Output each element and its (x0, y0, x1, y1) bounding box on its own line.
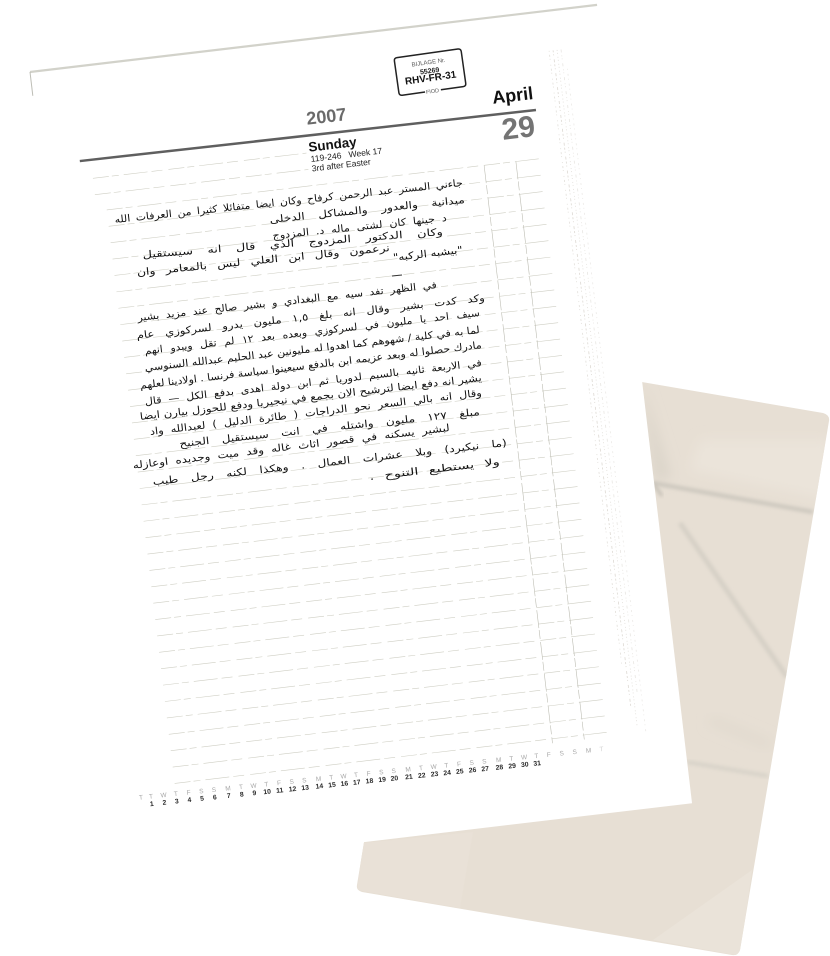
page top edge shadow (30, 5, 597, 72)
weekday letters: T (419, 765, 423, 772)
date numbers: 30 (521, 761, 529, 769)
handwritten note, second block: في الاربعة ثانيه بالسيم لدوريا ثم ابن دولة اهدى بدفع الكل — قال (144, 358, 483, 408)
date numbers: 1 (150, 801, 154, 808)
weekday letters: F (547, 752, 551, 759)
handwritten note, second block: مبلغ ١٢٧ مليون واشتله في انت سيستقيل الجنيح (179, 407, 480, 450)
date numbers: 3 (175, 798, 179, 806)
handwritten note, first block: وكان الدكتور المزدوج الذي قال انه سيستقيل (142, 227, 443, 261)
date numbers: 16 (340, 780, 349, 788)
date numbers: 28 (495, 764, 504, 772)
weekday letters: W (521, 754, 528, 762)
handwritten note, second block: وكد كدت بشير وقال انه بلغ ١,٥ مليون يدرو لسركوزي عام (136, 293, 486, 342)
date numbers: 19 (378, 776, 387, 784)
date numbers: 7 (227, 793, 231, 800)
weekday letters: W (430, 763, 438, 771)
exhibit stamp: BIJLAGE Nr. (411, 58, 446, 69)
scanner noise band at right (549, 49, 646, 736)
scanned diary page (30, 5, 692, 870)
handwritten note, second block: ولا يستطيع التنوح . (369, 457, 501, 483)
weekday letters: M (225, 785, 231, 793)
weekday letters: T (139, 794, 143, 802)
exhibit stamp: 55269 (420, 67, 440, 76)
weekday letters: S (302, 777, 308, 785)
weekday letters: S (211, 787, 217, 794)
weekday letters (139, 746, 604, 802)
weekday letters: F (366, 770, 371, 778)
date numbers: 21 (405, 774, 413, 781)
date numbers: 17 (353, 779, 361, 787)
date numbers (150, 760, 542, 808)
weekday letters: T (174, 791, 178, 798)
handwritten short dash (392, 275, 402, 276)
weekday letters: S (572, 749, 578, 756)
weekday letters: S (391, 768, 397, 775)
date numbers: 10 (263, 788, 272, 796)
weekday letters: T (239, 784, 243, 791)
handwritten note, first block: د جينها كان لشتى ماله د. المزدوج (272, 213, 447, 242)
handwritten note, second block: (ما نيكيرد) وبلا عشرات العمال . وهكذا لكنه رجل طيب (152, 438, 507, 488)
weekday letters: W (340, 773, 348, 781)
weekday letters: S (379, 769, 385, 777)
date numbers: 2 (162, 799, 167, 807)
ruled column lines (484, 162, 584, 743)
date numbers: 15 (328, 782, 336, 789)
weekday: Sunday (308, 134, 358, 155)
weekday letters: T (354, 772, 358, 779)
date numbers: 18 (365, 778, 374, 786)
weekday letters: F (277, 780, 281, 787)
date numbers: 31 (533, 760, 542, 768)
handwritten note, first block: نرعمون وقال ابن العلي ليس بالمعامر وان (136, 243, 390, 279)
handwritten note, second block (132, 280, 507, 488)
exhibit stamp (394, 49, 467, 100)
creased beige backing sheet (357, 368, 830, 956)
date numbers: 14 (315, 783, 324, 791)
day and week count: 119-246 Week 17 (310, 146, 383, 164)
date numbers: 12 (288, 786, 297, 794)
date numbers: 29 (508, 763, 517, 771)
weekday letters: T (444, 762, 449, 770)
handwritten note, second block: سيف احد يا مليون في لسركوزي وبعده بعد ١٢ لم تقل ويبدو انهم (144, 308, 480, 357)
handwritten note, first block: جاءني المستر عبد الرحمن كرفاح وكان ايضا متفائلا كثيرا من العرفات الله (114, 178, 463, 226)
date numbers: 5 (200, 796, 205, 803)
weekday letters: S (559, 750, 565, 758)
handwritten note, first block: "بيشبه الركبه" (393, 245, 463, 264)
calendar date strip (139, 746, 605, 809)
date numbers: 22 (418, 772, 426, 780)
day number: 29 (500, 110, 537, 147)
exhibit stamp: FIOD (426, 88, 440, 96)
date numbers: 20 (390, 775, 399, 783)
weekday letters: T (599, 746, 604, 753)
weekday letters: F (186, 789, 191, 797)
ruled lines (93, 126, 609, 785)
weekday letters: T (264, 781, 269, 789)
handwritten note, second block: يشير انه دفع ايضا لترشيح الان بجمع في نيجيريا ودفع للحوزل بيارن ايضا (139, 373, 483, 423)
year: 2007 (305, 104, 347, 129)
weekday letters: S (199, 788, 205, 795)
date numbers: 4 (187, 797, 192, 804)
weekday letters: M (586, 747, 592, 755)
handwritten note, second block: لما به في كلية / شهوهم كما اهدوا له مليونين عبد الحليم عبدالله السنوسي (144, 325, 480, 374)
handwritten note, second block: في الظهر تفد سيه مع البغدادي و بشير صالح عند مزيد بشير (136, 280, 438, 324)
handwritten note, first block (114, 178, 465, 279)
handwritten note, first block: ميدانية والعدور والمشاكل الدخلى (269, 195, 465, 226)
weekday letters: F (457, 761, 461, 768)
header rule (80, 107, 536, 164)
date numbers: 13 (301, 784, 310, 792)
date numbers: 25 (456, 768, 464, 776)
weekday letters: T (509, 755, 514, 763)
month: April (491, 83, 534, 108)
weekday letters: S (469, 760, 475, 767)
date numbers: 24 (443, 770, 452, 777)
page sheet (30, 5, 692, 870)
date numbers: 27 (481, 766, 490, 773)
weekday letters: S (289, 778, 295, 786)
handwritten note, second block: مادرك حصلوا له وبعد عزيمه ابن بالدفع سيعينوا سياسة فرنسا . اولادينا لعلهم (139, 340, 482, 392)
weekday letters: T (329, 774, 334, 782)
weekday letters: M (316, 776, 322, 783)
handwritten note, second block: لبشير يسكنه في قصور اثاث غاله وقد ميت وجديده اوعازله (132, 423, 450, 472)
date numbers: 8 (240, 791, 244, 799)
weekday letters: W (160, 792, 168, 800)
date numbers: 6 (213, 794, 217, 802)
liturgical note: 3rd after Easter (311, 157, 371, 174)
date numbers: 9 (252, 790, 257, 797)
date numbers: 26 (468, 767, 477, 775)
exhibit stamp: RHV-FR-31 (404, 69, 458, 88)
weekday letters: M (496, 757, 502, 764)
weekday letters: T (149, 793, 153, 801)
date numbers: 11 (276, 787, 284, 795)
date numbers: 23 (430, 771, 439, 779)
handwritten note, second block: وقال انه بالي السعر نحو الدراجات ( طائرة الدليل ) لعبدالله واد (149, 388, 483, 438)
weekday letters: S (482, 758, 488, 766)
page left edge shadow (30, 72, 33, 96)
weekday letters: T (534, 753, 539, 760)
weekday letters: W (250, 782, 258, 790)
weekday letters: M (405, 766, 411, 774)
